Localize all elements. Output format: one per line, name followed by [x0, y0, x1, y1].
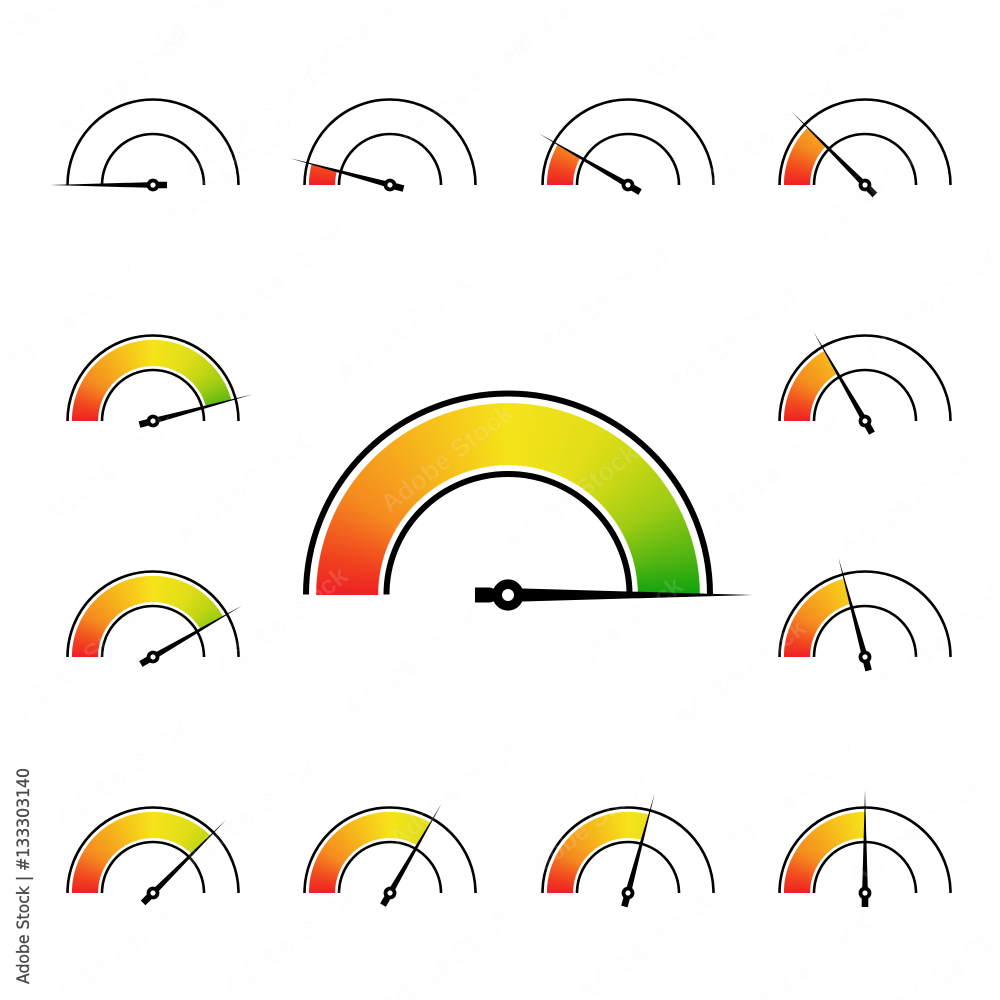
dial arcs and needle: [66, 334, 252, 428]
coloured band: [547, 812, 648, 893]
watermark pattern: Adobe Stock: [535, 237, 679, 359]
dial arcs and needle: [50, 98, 240, 192]
stock ID side label: Adobe Stock | #133303140: [14, 768, 33, 984]
gauge: row 4, 105 degrees: [541, 794, 715, 908]
gauge: row 4, 90 degrees: [778, 790, 952, 907]
watermark pattern: Adobe Stock: [513, 767, 657, 889]
dial arcs and needle: [66, 806, 240, 906]
dial arcs and needle: [539, 98, 715, 195]
watermark pattern: Adobe Stock: [170, 427, 314, 549]
gauge: row 3 left, 150 degrees: [66, 570, 242, 667]
watermark pattern: Adobe Stock: [210, 560, 354, 682]
coloured band: [72, 576, 234, 657]
coloured band: [547, 145, 580, 185]
watermark pattern: Adobe Stock: [545, 570, 689, 692]
watermark pattern: Adobe Stock: [858, 242, 1000, 364]
watermark pattern: Adobe Stock: [843, 770, 987, 892]
watermark pattern: Adobe Stock: [835, 442, 979, 564]
watermark pattern: Adobe Stock: [703, 410, 847, 532]
watermark pattern: Adobe Stock: [808, 122, 952, 244]
large gradient band: [316, 402, 700, 594]
gauge: row 1, 30 degrees: [539, 98, 715, 195]
watermark pattern: Adobe Stock: [0, 257, 142, 379]
gauge: row 3 right, 75 degrees: [778, 558, 952, 672]
watermark pattern: Adobe Stock: [208, 217, 352, 339]
coloured band: [72, 812, 210, 893]
watermark pattern: Adobe Stock: [668, 612, 812, 734]
watermark pattern: Adobe Stock: [331, 267, 475, 389]
watermark pattern: Adobe Stock: [38, 407, 182, 529]
dial arcs and needle: [290, 98, 477, 192]
coloured band: [72, 340, 234, 421]
watermark pattern: Adobe Stock: [53, 22, 197, 144]
watermark pattern: Adobe Stock: [8, 602, 152, 724]
dial arcs and needle: [66, 570, 242, 667]
watermark pattern: Adobe Stock: [178, 752, 322, 874]
gauge: row 4, 120 degrees: [303, 804, 477, 907]
watermark pattern: Adobe Stock: [663, 277, 807, 399]
watermark pattern: Adobe Stock: [178, 62, 322, 184]
watermark pattern: Adobe Stock: [393, 32, 537, 154]
large dial arcs and needle: [303, 390, 752, 611]
dial arcs and needle: [778, 332, 952, 435]
dial arcs and needle: [778, 790, 952, 907]
watermark pattern: Adobe Stock: [50, 712, 194, 834]
watermark pattern: Adobe Stock: [500, 437, 644, 559]
coloured band: [309, 164, 337, 185]
gauge: row 1, 15 degrees: [290, 98, 477, 192]
coloured band: [784, 351, 836, 421]
watermark pattern: Adobe Stock: [383, 732, 527, 854]
watermark pattern: Adobe Stock: [218, 880, 362, 1000]
dial arcs and needle: [778, 98, 952, 198]
dial arcs and needle: [778, 558, 952, 672]
large central gauge at full reading: [303, 390, 752, 611]
coloured band: [72, 104, 234, 185]
gauge: row 1, 45 degrees: [778, 98, 952, 198]
coloured band: [309, 812, 430, 893]
coloured band: [784, 578, 850, 657]
gauge: row 2 left, 165 degrees: [66, 334, 252, 428]
gauge: row 1, empty reading: [50, 98, 240, 192]
watermark pattern: Adobe Stock: [340, 602, 484, 724]
dial arcs and needle: [303, 804, 477, 907]
watermark pattern: Adobe Stock: [158, 112, 302, 234]
watermark pattern: Adobe Stock: [698, 72, 842, 194]
watermark pattern: Adobe Stock: [718, 737, 862, 859]
watermark pattern: Adobe Stock: [375, 397, 519, 519]
dial arcs and needle: [541, 794, 715, 908]
coloured band: [784, 812, 864, 893]
gauge: row 2 right, 60 degrees: [778, 332, 952, 435]
coloured band: [784, 128, 826, 185]
gauge: row 4, 135 degrees: [66, 806, 240, 906]
